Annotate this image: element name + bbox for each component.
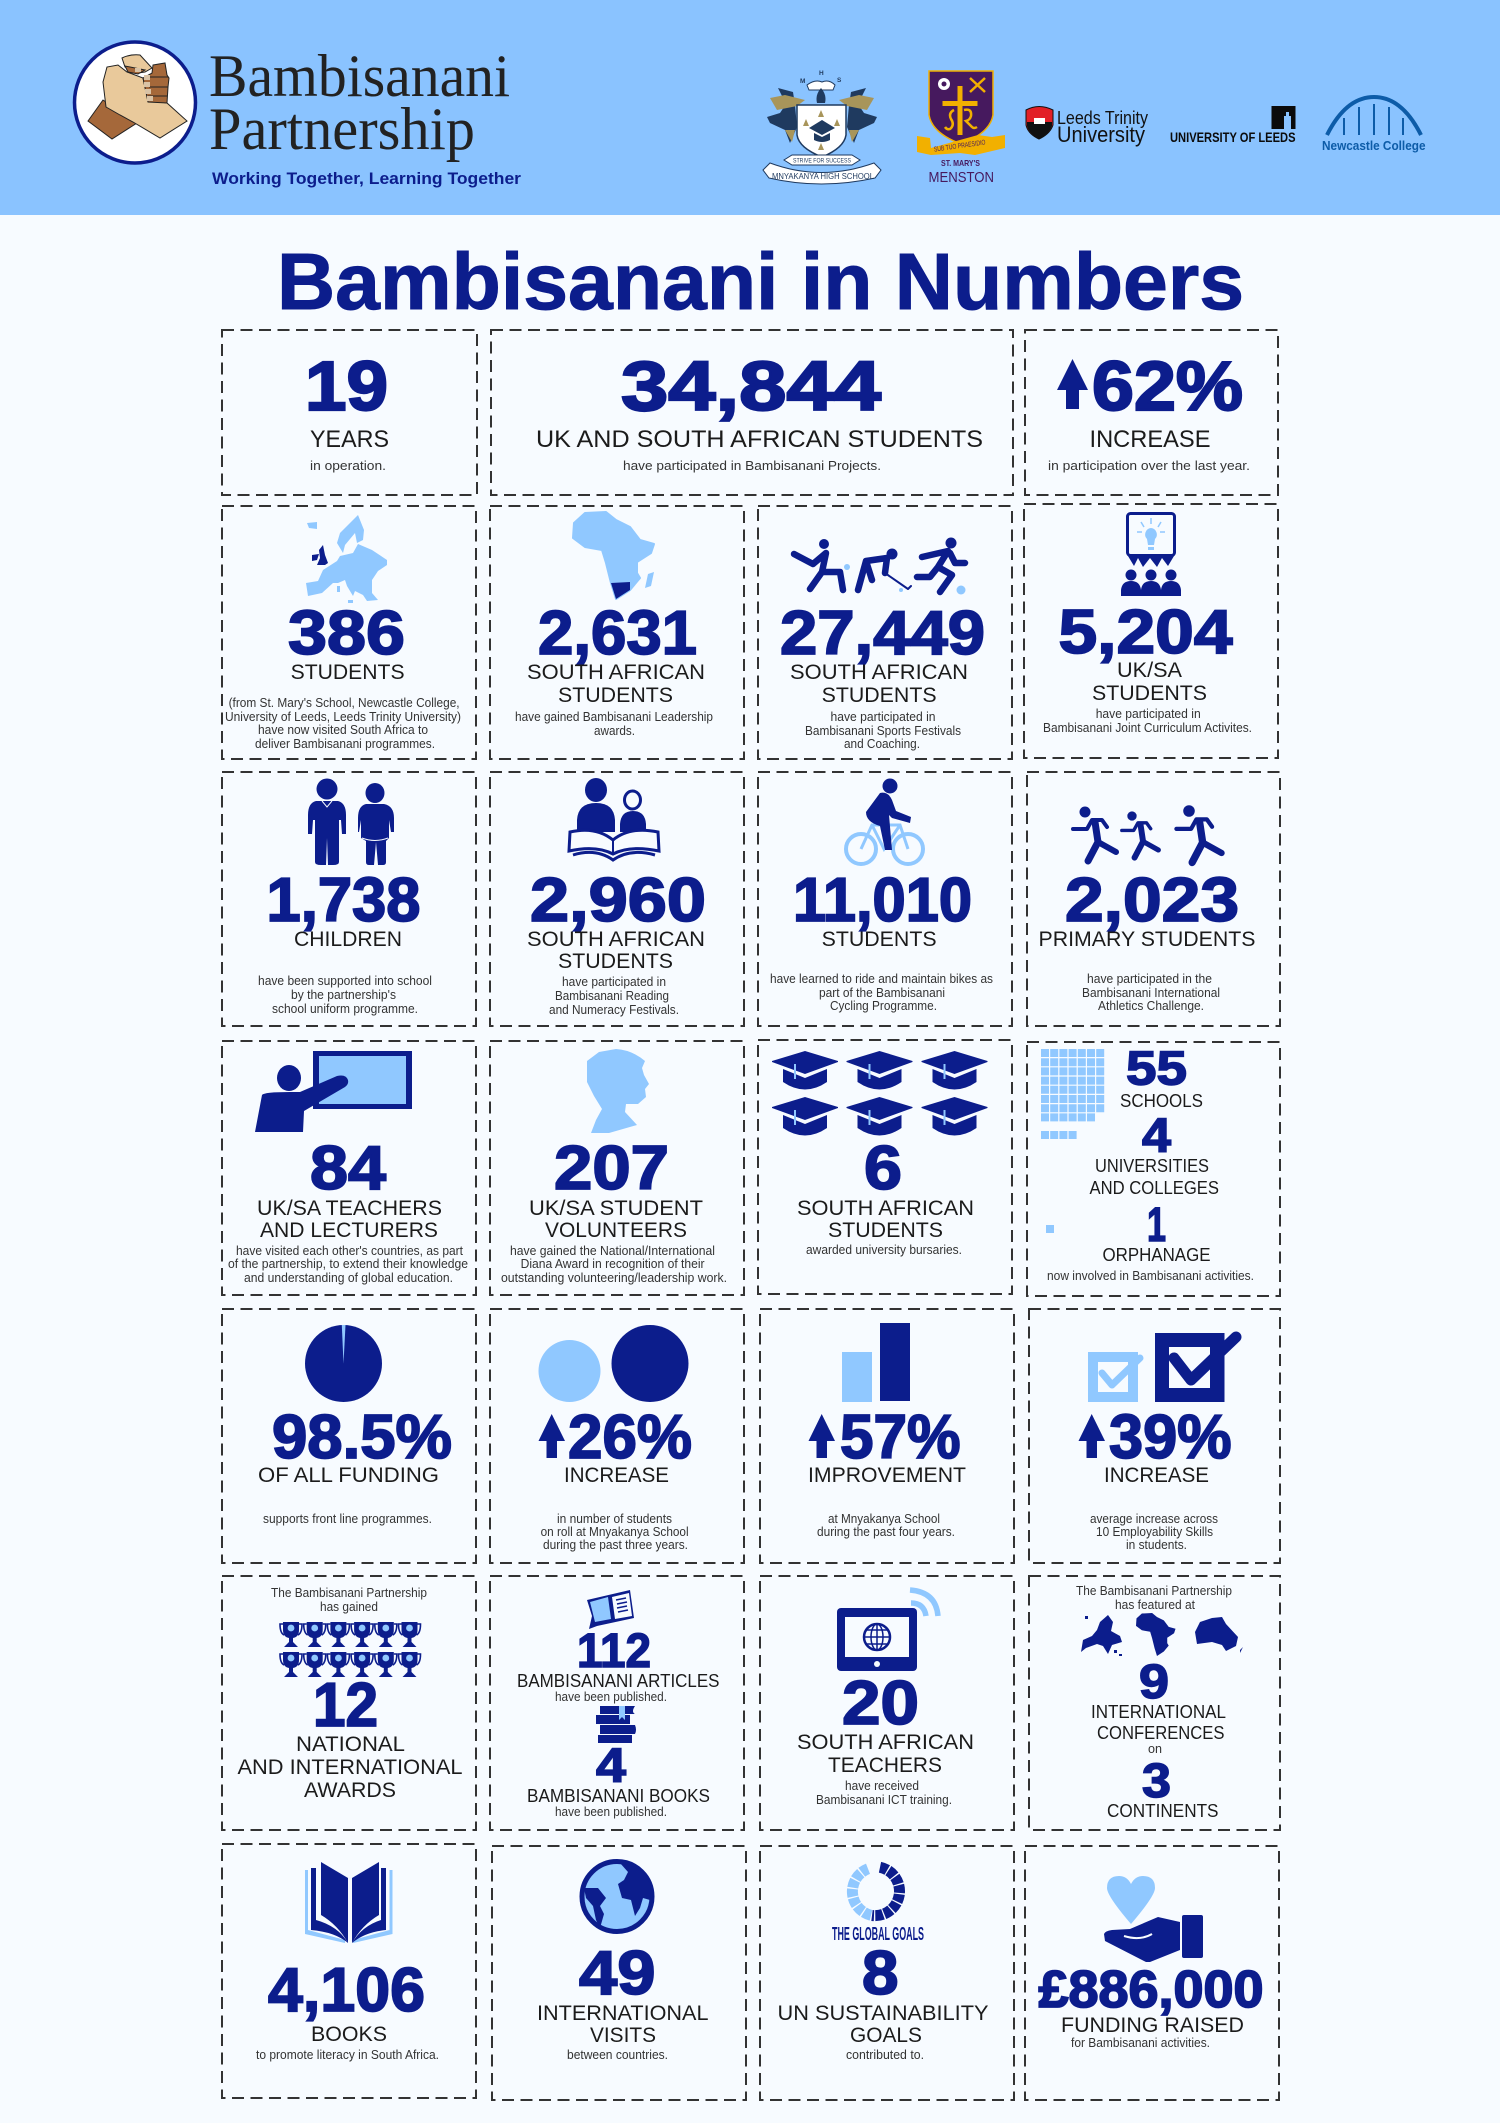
number: 112: 112 xyxy=(577,1625,651,1678)
label: South African students xyxy=(797,1196,974,1242)
icon: global goals ring xyxy=(852,1867,899,1916)
description: and understanding of global education. xyxy=(244,1271,453,1285)
description xyxy=(1090,1512,1218,1552)
icon: three continents xyxy=(1081,1613,1243,1656)
panel: 39% increase xyxy=(1029,1309,1280,1563)
label: national and international awards: AND INTERNATIONAL xyxy=(238,1755,463,1779)
label: orphanage: ORPHANAGE xyxy=(1102,1244,1210,1265)
logo: St Mary's Menston: SUB TUO PRAESIDIO xyxy=(934,139,986,154)
description: have been published. xyxy=(555,1805,667,1819)
description xyxy=(805,710,961,751)
label: South African students: SOUTH AFRICAN xyxy=(527,927,705,951)
label: international conferences: INTERNATIONAL xyxy=(1091,1701,1226,1722)
panel: 112 articles and 4 books xyxy=(490,1576,744,1830)
number: 98.5%: 98.5% xyxy=(272,1403,452,1472)
icon: up arrow xyxy=(808,1414,835,1458)
description: have gained the National/International xyxy=(510,1244,715,1258)
label: of all funding: OF ALL FUNDING xyxy=(258,1463,439,1487)
panel: 49 international visits xyxy=(492,1846,746,2100)
logo: Mnyakanya High School crest: H xyxy=(819,70,824,77)
label: years: YEARS xyxy=(310,426,389,453)
panel: 2,960 reading xyxy=(490,772,744,1026)
description: and Numeracy Festivals. xyxy=(549,1003,679,1017)
description: have now visited South Africa to xyxy=(258,723,428,737)
description: Bambisanani Sports Festivals xyxy=(805,724,961,738)
description xyxy=(1082,972,1220,1013)
panel: 8 UN goals: THE GLOBAL GOALS xyxy=(832,1924,924,1944)
number: 207: 207 xyxy=(554,1134,669,1203)
panel: 98.5% of funding xyxy=(222,1309,476,1563)
number: 2,631: 2,631 xyxy=(538,599,697,668)
panel: 62% increase xyxy=(1025,330,1278,495)
panel: 11,010 cycling xyxy=(758,772,1012,1026)
description: Bambisanani Reading xyxy=(555,989,669,1003)
panel: 5,204 curriculum xyxy=(1024,504,1278,758)
label: books: BOOKS xyxy=(311,2022,387,2046)
panel: 19 years xyxy=(222,330,477,495)
logo: Newcastle College: Newcastle College xyxy=(1322,138,1426,153)
label: continents: CONTINENTS xyxy=(1107,1800,1218,1821)
description xyxy=(541,1512,689,1552)
description: in operation. xyxy=(310,459,386,473)
label: South African teachers: SOUTH AFRICAN xyxy=(797,1730,974,1754)
description: have participated in Bambisanani Projects. xyxy=(623,459,881,473)
logo wordmark: Partnership xyxy=(209,96,475,162)
logo: Mnyakanya High School crest: S xyxy=(837,77,842,84)
panel: schools, universities and orphanage xyxy=(1027,1042,1280,1296)
label: schools: SCHOOLS xyxy=(1120,1090,1203,1111)
description: Bambisanani Joint Curriculum Activites. xyxy=(1043,721,1252,735)
intro text xyxy=(1076,1584,1232,1612)
description: at Mnyakanya School xyxy=(828,1512,940,1526)
description: awarded university bursaries. xyxy=(806,1243,962,1257)
description xyxy=(225,696,461,751)
icon: 1 orphanage square xyxy=(1046,1225,1054,1233)
icon: map of Africa xyxy=(573,512,654,599)
label: student volunteers: VOLUNTEERS xyxy=(545,1218,687,1242)
number: £886,000: £886,000 xyxy=(1038,1961,1264,2019)
number: 4: 4 xyxy=(596,1740,626,1793)
panel: 8 UN goals xyxy=(760,1846,1014,2100)
logo: St Mary's Menston: MENSTON xyxy=(928,169,994,186)
label: South African students: SOUTH AFRICAN xyxy=(790,660,968,684)
intro text: has gained xyxy=(320,1600,378,1614)
logo: Newcastle College xyxy=(1322,97,1426,153)
panel: 6 bursaries xyxy=(758,1040,1012,1294)
label: South African students xyxy=(790,660,968,707)
number: 11,010: 11,010 xyxy=(793,866,972,935)
description xyxy=(228,1244,468,1285)
icon: pie chart xyxy=(305,1325,382,1402)
intro text: The Bambisanani Partnership xyxy=(1076,1584,1232,1598)
label: UN sustainability goals: GOALS xyxy=(850,2023,922,2047)
label: increase: INCREASE xyxy=(1104,1463,1209,1487)
icon: magazine xyxy=(587,1590,634,1629)
description xyxy=(515,710,713,738)
label: students: STUDENTS xyxy=(291,660,405,684)
description: have participated in the xyxy=(1087,972,1212,986)
intro text xyxy=(271,1586,427,1614)
icon: two checkboxes xyxy=(1088,1333,1236,1402)
icon: 55 school squares xyxy=(1041,1049,1104,1121)
description: have visited each other's countries, as part xyxy=(236,1244,464,1258)
logo wordmark xyxy=(209,43,510,162)
description: have been published. xyxy=(555,1690,667,1704)
label: international conferences: CONFERENCES xyxy=(1097,1722,1224,1743)
title: Bambisanani in Numbers xyxy=(277,237,1244,326)
number: 49: 49 xyxy=(579,1939,656,2008)
label: student volunteers xyxy=(529,1196,703,1242)
description: average increase across xyxy=(1090,1512,1218,1526)
label: funding raised: FUNDING RAISED xyxy=(1061,2013,1244,2037)
label: increase: INCREASE xyxy=(564,1463,669,1487)
description: contributed to. xyxy=(846,2048,924,2062)
header band xyxy=(0,0,1500,215)
icon: adult and child reading xyxy=(569,778,659,860)
number: 2,960: 2,960 xyxy=(530,866,706,935)
icon: sports figures xyxy=(794,538,966,594)
icon: up arrow xyxy=(538,1414,565,1458)
description: 10 Employability Skills xyxy=(1096,1525,1213,1539)
number: 19: 19 xyxy=(305,347,388,425)
icon: two children in uniform xyxy=(308,778,394,865)
label: teachers and lecturers xyxy=(257,1196,442,1242)
logo: Leeds Trinity University: Leeds Trinity xyxy=(1057,108,1148,128)
label: international visits: VISITS xyxy=(590,2023,656,2047)
icon: up arrow xyxy=(1057,359,1088,409)
description: have participated in xyxy=(562,975,666,989)
description: to promote literacy in South Africa. xyxy=(256,2048,439,2062)
description: deliver Bambisanani programmes. xyxy=(255,737,435,751)
panel: 2,631 leadership awards xyxy=(490,506,744,759)
logo: Mnyakanya High School crest: STRIVE FOR SUCCESS xyxy=(793,158,852,164)
label: improvement: IMPROVEMENT xyxy=(808,1463,966,1487)
icon: open book xyxy=(305,1862,392,1943)
logo: St Mary's Menston xyxy=(917,71,1005,186)
icon: heart in hand xyxy=(1104,1876,1203,1962)
description: and Coaching. xyxy=(844,737,920,751)
number: 4: 4 xyxy=(1142,1110,1171,1163)
description: in participation over the last year. xyxy=(1048,459,1250,473)
panel: 26% increase xyxy=(490,1309,744,1563)
description: have participated in xyxy=(830,710,936,724)
description xyxy=(501,1244,727,1285)
label: South African students: STUDENTS xyxy=(828,1218,943,1242)
icon: stack of books xyxy=(596,1706,636,1743)
panel: 386 students xyxy=(222,506,476,759)
description: now involved in Bambisanani activities. xyxy=(1047,1269,1254,1283)
logo: Bambisanani handshake xyxy=(74,42,196,163)
logo: Mnyakanya High School crest xyxy=(763,70,881,184)
icon: two circles xyxy=(538,1325,688,1402)
label: national and international awards xyxy=(238,1732,463,1802)
label: UK and South African students: UK AND SOUTH AFRICAN STUDENTS xyxy=(536,426,983,453)
connector word: on: on xyxy=(1148,1742,1162,1756)
label: South African teachers xyxy=(797,1730,974,1777)
label: teachers and lecturers: AND LECTURERS xyxy=(260,1218,438,1242)
label: South African students xyxy=(527,660,705,707)
logo: Mnyakanya High School crest: MNYAKANYA HIGH SCHOOL xyxy=(772,172,875,181)
panel: 84 teachers xyxy=(222,1041,476,1295)
panel: 20 ICT teachers xyxy=(760,1576,1014,1830)
icon: map of Europe xyxy=(306,515,387,603)
number: 1,738: 1,738 xyxy=(266,866,420,935)
label: teachers and lecturers: UK/SA TEACHERS xyxy=(257,1196,442,1220)
label: national and international awards: AWARDS xyxy=(304,1778,396,1802)
number: 4,106: 4,106 xyxy=(268,1956,425,2025)
panel: 207 volunteers xyxy=(490,1041,744,1295)
description: during the past three years. xyxy=(543,1538,688,1552)
panel: 27,449 sports xyxy=(758,506,1012,759)
number: 386: 386 xyxy=(288,599,405,668)
description: have gained Bambisanani Leadership xyxy=(515,710,713,724)
label: children: CHILDREN xyxy=(294,927,402,951)
description: have been supported into school xyxy=(258,974,432,988)
panel: 12 awards xyxy=(222,1576,476,1830)
description: on roll at Mnyakanya School xyxy=(541,1525,689,1539)
description: have learned to ride and maintain bikes as xyxy=(770,972,993,986)
description: Cycling Programme. xyxy=(830,999,937,1013)
intro text: has featured at xyxy=(1115,1598,1195,1612)
label: South African teachers: TEACHERS xyxy=(828,1753,942,1777)
description: in number of students xyxy=(557,1512,672,1526)
description: during the past four years. xyxy=(817,1525,955,1539)
logo: University of Leeds: UNIVERSITY OF LEEDS xyxy=(1170,130,1296,145)
description xyxy=(817,1512,955,1539)
panel: 57% improvement xyxy=(760,1309,1014,1563)
panel: 4,106 books xyxy=(222,1844,476,2098)
description: supports front line programmes. xyxy=(263,1512,432,1526)
number: 27,449: 27,449 xyxy=(780,599,985,668)
description: Diana Award in recognition of their xyxy=(521,1257,705,1271)
tagline: Working Together, Learning Together xyxy=(212,169,521,188)
number: 84: 84 xyxy=(310,1134,387,1203)
description: awards. xyxy=(594,724,635,738)
icon: six graduation caps xyxy=(772,1051,988,1136)
description: between countries. xyxy=(567,2048,668,2062)
description: Bambisanani International xyxy=(1082,986,1220,1000)
number: 6: 6 xyxy=(864,1134,902,1203)
description: Athletics Challenge. xyxy=(1098,999,1204,1013)
label: international visits xyxy=(537,2001,709,2047)
label: UK/SA students xyxy=(1092,658,1207,705)
icon: cyclist xyxy=(846,778,923,864)
icon: teacher at board xyxy=(255,1051,412,1132)
number: 20: 20 xyxy=(842,1669,919,1738)
description xyxy=(258,974,432,1016)
label: South African students: SOUTH AFRICAN xyxy=(527,660,705,684)
panel: £886,000 funding xyxy=(1025,1846,1279,2100)
number: 26%: 26% xyxy=(568,1403,692,1472)
label: South African students: STUDENTS xyxy=(822,683,937,707)
number: 3: 3 xyxy=(1142,1755,1171,1808)
number: 2,023: 2,023 xyxy=(1065,866,1239,935)
label: universities and colleges xyxy=(1090,1155,1219,1198)
label: student volunteers: UK/SA STUDENT xyxy=(529,1196,703,1220)
number: 12: 12 xyxy=(313,1671,378,1740)
logo: University of Leeds xyxy=(1170,106,1296,145)
description xyxy=(816,1779,952,1807)
number: 5,204: 5,204 xyxy=(1058,598,1233,667)
icon: globe xyxy=(582,1862,652,1932)
icon: tablet with globe and wifi xyxy=(837,1590,938,1671)
description: Bambisanani ICT training. xyxy=(816,1793,952,1807)
label: South African students: SOUTH AFRICAN xyxy=(797,1196,974,1220)
description: University of Leeds, Leeds Trinity University) xyxy=(225,710,461,724)
label: students: STUDENTS xyxy=(822,927,937,951)
label: UN sustainability goals: UN SUSTAINABILITY xyxy=(778,2001,988,2025)
label: international conferences xyxy=(1091,1701,1226,1743)
label: South African students: STUDENTS xyxy=(558,683,673,707)
description xyxy=(549,975,679,1017)
label: UK/SA students: STUDENTS xyxy=(1092,681,1207,705)
description: by the partnership's xyxy=(291,988,396,1002)
description: for Bambisanani activities. xyxy=(1071,2036,1210,2050)
label: primary students: PRIMARY STUDENTS xyxy=(1038,927,1256,951)
icon: 4 university squares xyxy=(1041,1131,1077,1139)
label: international visits: INTERNATIONAL xyxy=(537,2001,709,2025)
number: 62%: 62% xyxy=(1092,347,1243,425)
logo: Leeds Trinity University xyxy=(1026,106,1148,147)
number: 34,844: 34,844 xyxy=(621,347,881,425)
panel: 34,844 students xyxy=(491,330,1013,495)
label: increase: INCREASE xyxy=(1090,426,1210,453)
label: UK/SA students: UK/SA xyxy=(1117,658,1183,682)
number: 55: 55 xyxy=(1126,1043,1187,1096)
description: part of the Bambisanani xyxy=(819,986,945,1000)
number: 39%: 39% xyxy=(1109,1403,1232,1472)
panel: 2,023 primary students xyxy=(1027,772,1280,1026)
label: universities and colleges: UNIVERSITIES xyxy=(1095,1155,1209,1176)
icon: head silhouette xyxy=(587,1049,649,1133)
description xyxy=(770,972,993,1013)
description: of the partnership, to extend their knowledge xyxy=(228,1257,468,1271)
panel: 9 conferences on 3 continents xyxy=(1029,1576,1280,1830)
label: South African students xyxy=(527,927,705,973)
label: national and international awards: NATIONAL xyxy=(296,1732,405,1756)
logo: Leeds Trinity University: University xyxy=(1057,122,1145,147)
intro text: The Bambisanani Partnership xyxy=(271,1586,427,1600)
description: have received xyxy=(845,1779,919,1793)
description: in students. xyxy=(1126,1538,1187,1552)
label: South African students: STUDENTS xyxy=(558,949,673,973)
logo wordmark: Bambisanani xyxy=(209,43,510,109)
icon: up arrow xyxy=(1078,1414,1105,1458)
label: articles: BAMBISANANI ARTICLES xyxy=(517,1670,720,1691)
label: universities and colleges: AND COLLEGES xyxy=(1090,1177,1219,1198)
description: have participated in xyxy=(1096,707,1201,721)
description: (from St. Mary's School, Newcastle College, xyxy=(229,696,460,710)
number: 1: 1 xyxy=(1147,1199,1166,1252)
number: 9: 9 xyxy=(1139,1656,1169,1709)
icon: twelve trophies xyxy=(280,1622,420,1677)
label: books: BAMBISANANI BOOKS xyxy=(527,1785,710,1806)
label: UN sustainability goals xyxy=(778,2001,988,2047)
number: 8: 8 xyxy=(862,1939,898,2008)
panel: 1,738 children xyxy=(222,772,476,1026)
number: 57%: 57% xyxy=(840,1403,960,1472)
icon: two bars xyxy=(842,1323,910,1402)
description xyxy=(1043,707,1252,735)
logo: Mnyakanya High School crest: M xyxy=(800,78,805,85)
description: outstanding volunteering/leadership work. xyxy=(501,1271,727,1285)
description: school uniform programme. xyxy=(272,1002,418,1016)
icon: three runners xyxy=(1073,805,1222,862)
icon: idea presentation xyxy=(1121,514,1181,596)
logo: St Mary's Menston: ST. MARY'S xyxy=(941,158,980,168)
